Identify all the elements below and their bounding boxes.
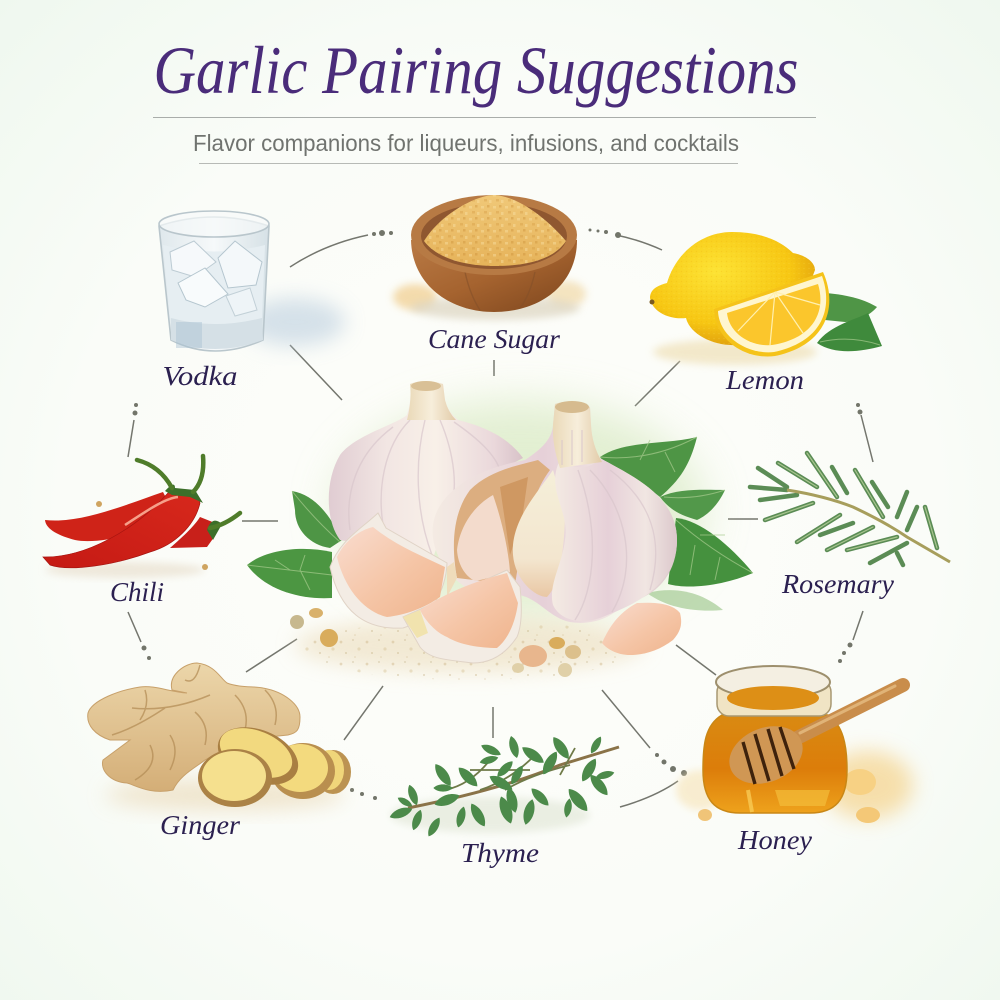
icon: rosemary bbox=[750, 453, 950, 565]
subtitle: Flavor companions for liqueurs, infusions, and cocktails bbox=[193, 130, 739, 156]
label: Chili: Chili bbox=[110, 577, 164, 607]
label: Honey: Honey bbox=[737, 825, 812, 855]
label: Thyme: Thyme bbox=[461, 838, 539, 868]
sugar mound bbox=[424, 195, 566, 266]
leaves bbox=[247, 437, 753, 611]
label: Lemon: Lemon bbox=[725, 365, 804, 395]
label: Ginger: Ginger bbox=[160, 810, 241, 840]
icon: lemon bbox=[650, 232, 882, 365]
icon: central garlic with leaves bbox=[247, 381, 753, 680]
title: Garlic Pairing Suggestions bbox=[154, 32, 798, 108]
label: Rosemary: Rosemary bbox=[781, 569, 894, 599]
seeds bbox=[290, 608, 581, 677]
icon: ginger bbox=[88, 663, 351, 811]
left bulb bbox=[329, 381, 523, 558]
icon: thyme bbox=[388, 734, 619, 838]
cloves bbox=[330, 513, 681, 663]
icon: vodka glass bbox=[159, 211, 345, 351]
right bulb bbox=[433, 401, 677, 623]
label: Vodka: Vodka bbox=[162, 361, 238, 391]
icon: honey jar with dipper bbox=[676, 666, 913, 823]
connector lines and dots bbox=[128, 228, 873, 807]
label: Cane Sugar: Cane Sugar bbox=[428, 324, 561, 354]
icon: cane sugar bowl bbox=[393, 195, 586, 320]
icon: chili peppers bbox=[43, 456, 240, 578]
